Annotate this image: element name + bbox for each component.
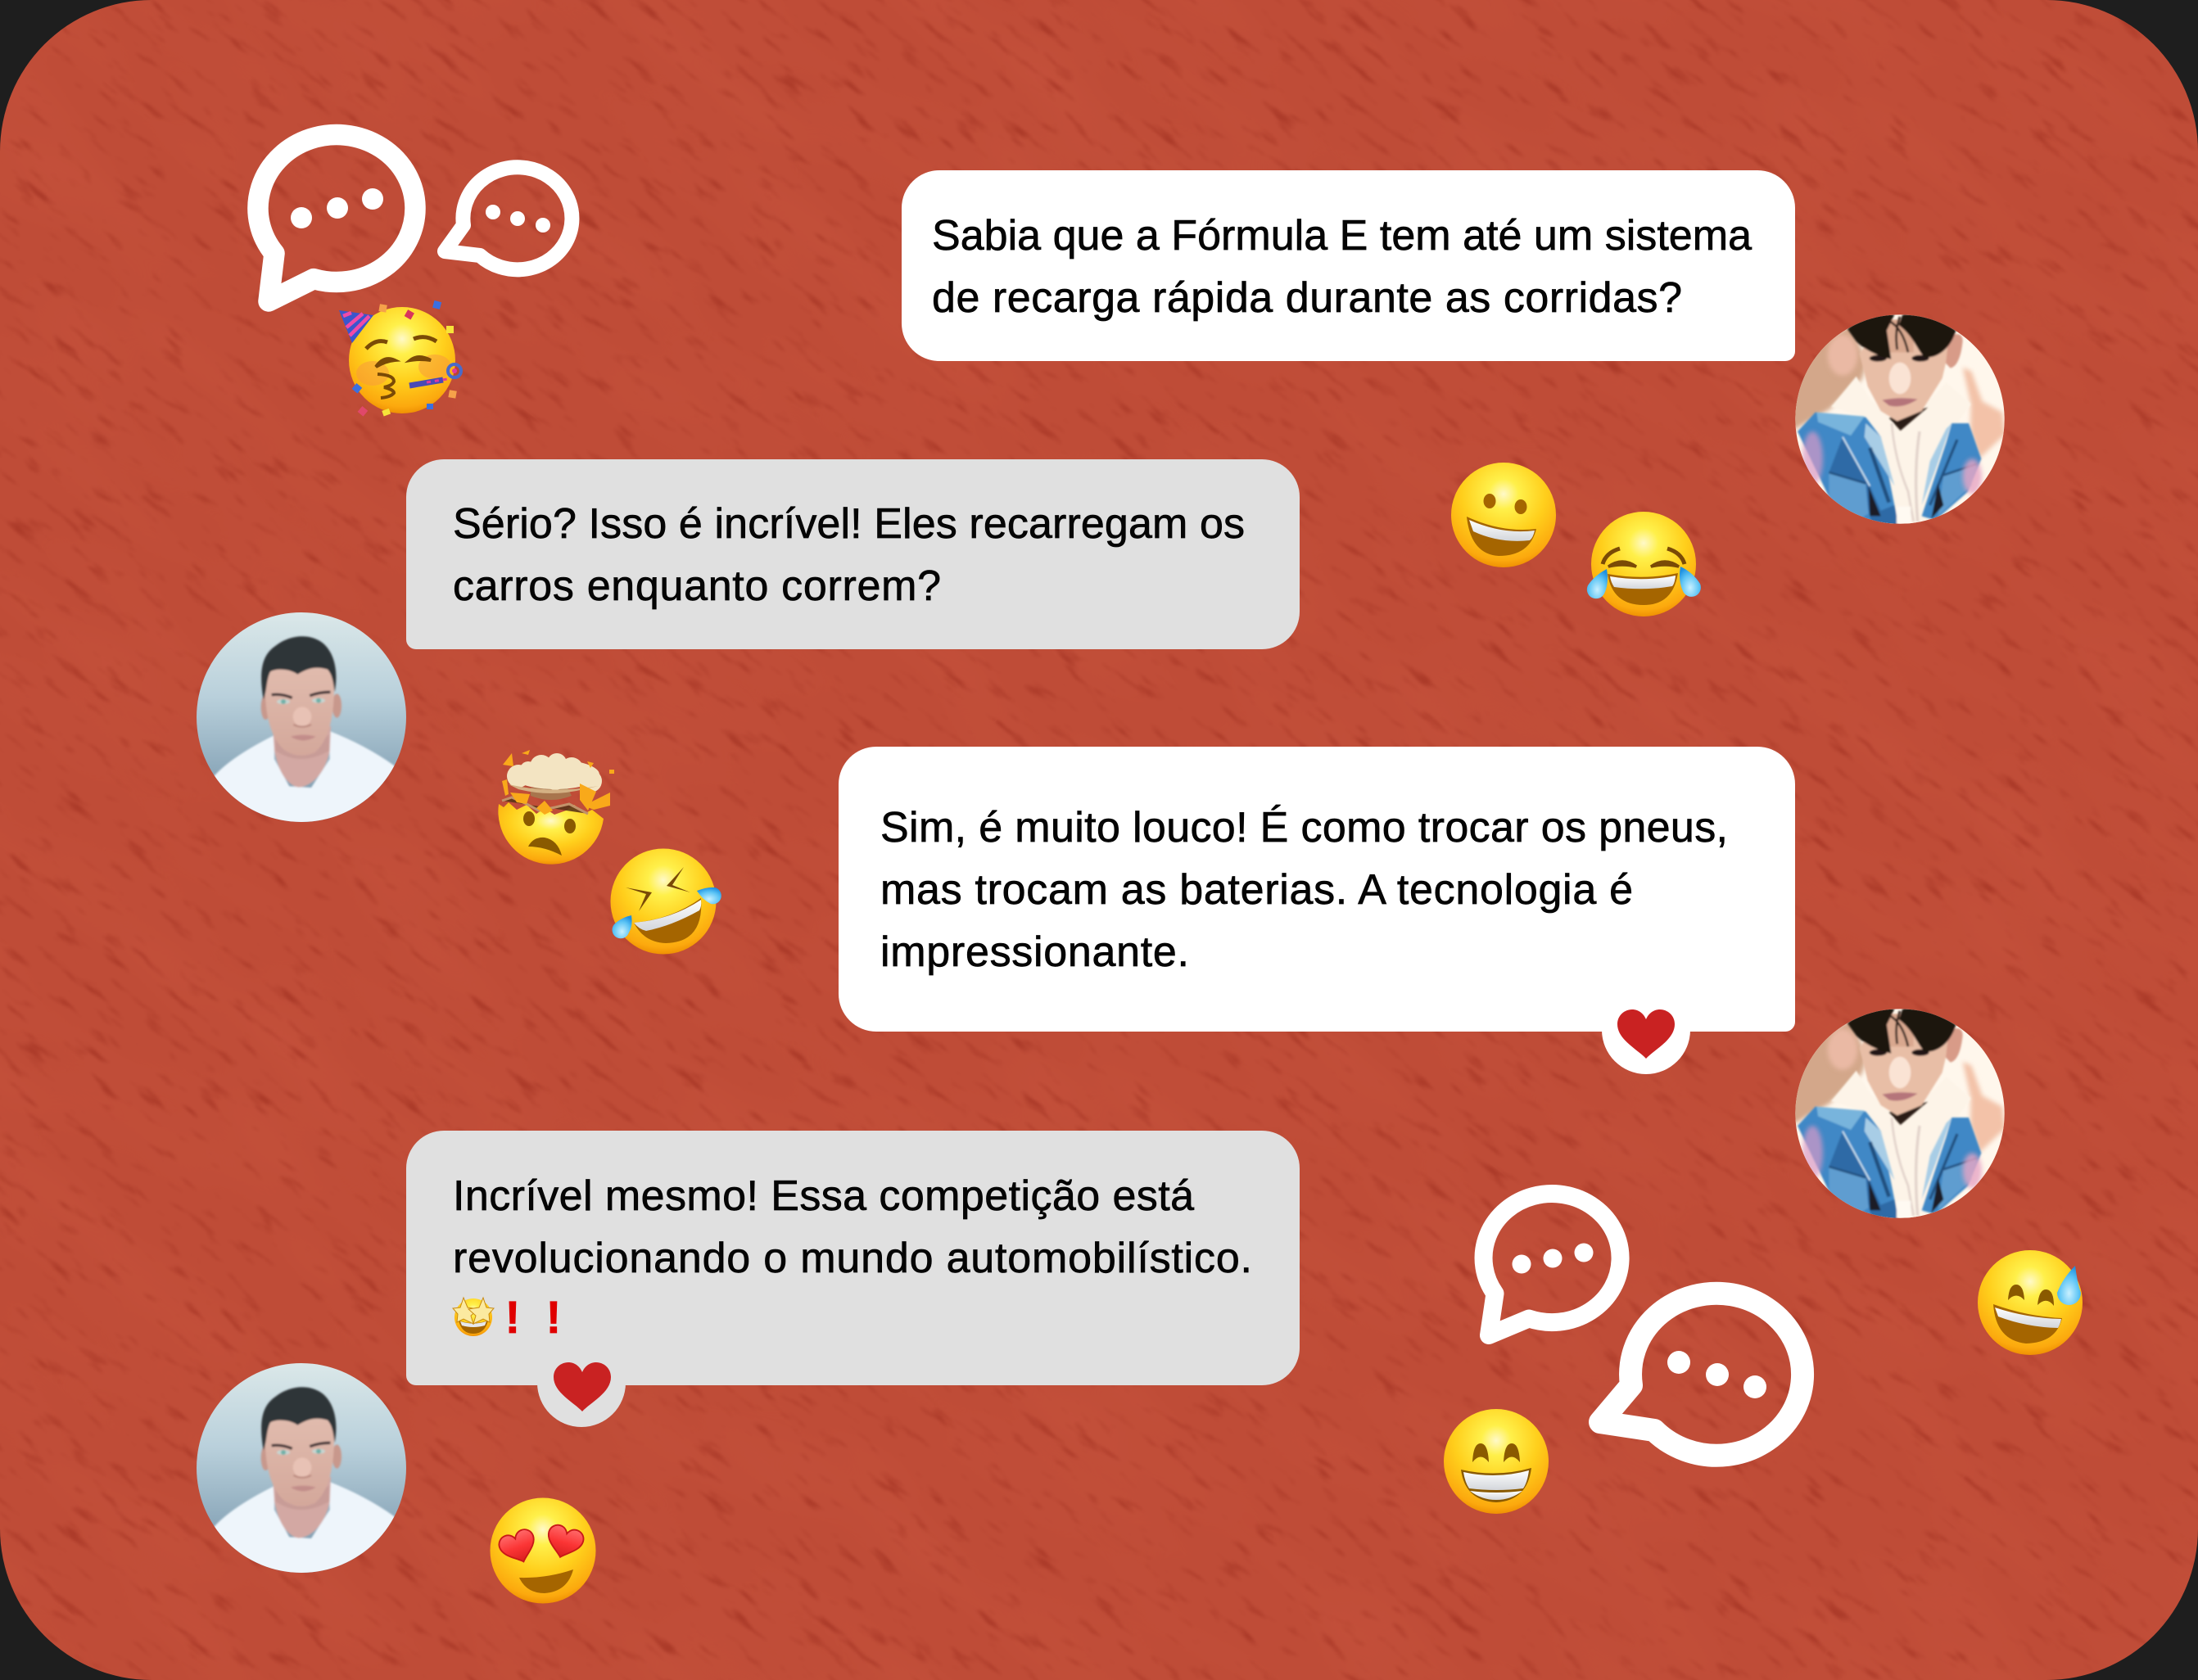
icon: star-struck emoji inline	[453, 1298, 494, 1336]
avatar: man in white t-shirt, upper	[194, 612, 412, 843]
heart reaction on bubble 4	[537, 1339, 626, 1427]
icon: rolling on floor laughing emoji	[611, 848, 721, 955]
icons: red exclamation marks: !	[505, 1291, 520, 1343]
message text 4: revolucionando o mundo automobilístico.	[453, 1235, 1252, 1282]
icon: sweat smile emoji	[1978, 1250, 2083, 1355]
message bubble 2	[406, 459, 1300, 649]
message text 4	[453, 1172, 1252, 1282]
message text 3	[880, 804, 1728, 976]
icons: red exclamation marks: !	[546, 1291, 561, 1343]
icon: small chat bubble top left	[445, 167, 572, 269]
message bubble 3	[839, 747, 1795, 1074]
message text 1	[932, 212, 1752, 322]
message text 2: carros enquanto correm?	[453, 562, 941, 610]
icons: red exclamation marks	[505, 1291, 561, 1343]
icon: grinning emoji	[1451, 463, 1556, 567]
icon: heart eyes emoji	[490, 1498, 596, 1603]
message text 3: impressionante.	[880, 928, 1189, 976]
icon: partying face emoji	[339, 300, 461, 417]
icon: big chat bubble top left	[258, 135, 415, 301]
message text 4: Incrível mesmo! Essa competição está	[453, 1172, 1194, 1220]
message bubble 4	[406, 1131, 1300, 1427]
message text 1: Sabia que a Fórmula E tem até um sistema	[932, 212, 1752, 260]
message text 3: mas trocam as baterias. A tecnologia é	[880, 866, 1633, 914]
icon: chat bubble right, upper	[1484, 1194, 1621, 1335]
message text 3: Sim, é muito louco! É como trocar os pneus,	[880, 804, 1728, 851]
icon: beaming emoji	[1444, 1409, 1549, 1514]
icon: chat bubble right, lower	[1600, 1294, 1802, 1456]
avatar: man in denim jacket, top	[1788, 309, 2012, 532]
heart reaction on bubble 3	[1602, 986, 1690, 1074]
message text 2: Sério? Isso é incrível! Eles recarregam os	[453, 500, 1245, 548]
icon: tears of joy emoji	[1587, 512, 1701, 616]
avatar: man in white t-shirt, lower	[194, 1362, 412, 1594]
avatar: man in denim jacket, lower	[1788, 1003, 2012, 1226]
message text 1: de recarga rápida durante as corridas?	[932, 274, 1682, 322]
message text 2	[453, 500, 1245, 610]
message bubble 1	[902, 170, 1795, 361]
icon: mind blown emoji	[498, 750, 614, 865]
